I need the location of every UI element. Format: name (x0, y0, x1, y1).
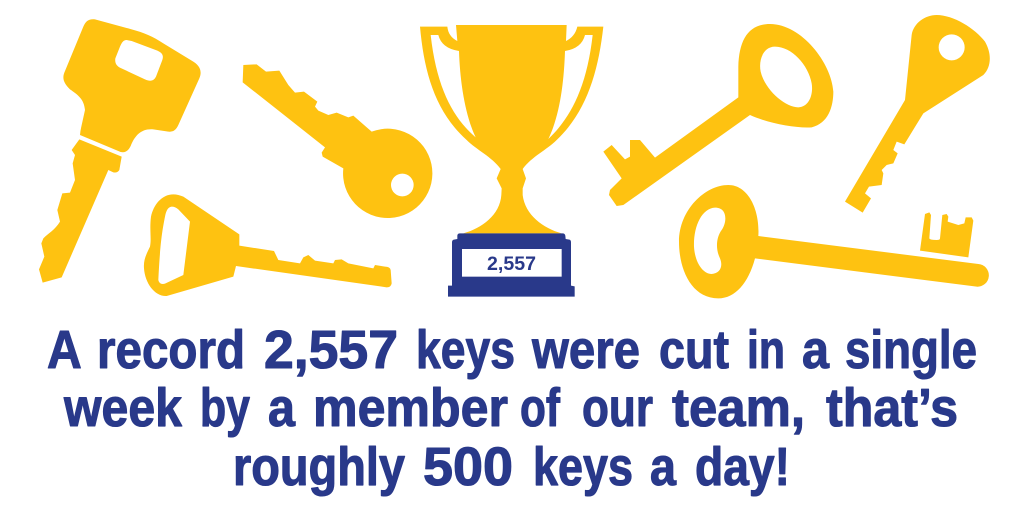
headline line 2: a (268, 379, 296, 438)
icon: long-shaft key, bottom right (679, 185, 989, 298)
icon: bottle-opener key, bottom left (144, 194, 392, 296)
headline line 1: were (531, 321, 640, 380)
trophy value: 2,557 (487, 253, 536, 275)
headline line 2: week (63, 379, 182, 438)
icon: teardrop-head key, far right (845, 15, 990, 213)
headline line 1: cut (659, 321, 729, 380)
headline line 1: in (747, 321, 785, 380)
headline line 3: keys (533, 438, 633, 497)
key bit (920, 212, 973, 257)
headline line 1: keys (416, 321, 515, 380)
headline line 1: record (97, 321, 245, 380)
headline line 2: team, (672, 379, 805, 438)
headline line 1: single (845, 321, 977, 380)
headline line 2: that’s (826, 379, 958, 438)
headline line 2: our (582, 379, 653, 438)
headline (47, 321, 977, 497)
headline line 1: 2,557 (264, 321, 398, 380)
headline line 3: 500 (423, 438, 513, 497)
trophy cup (420, 25, 603, 233)
trophy base (448, 233, 575, 297)
headline line 3: roughly (233, 438, 405, 497)
headline line 2: member (313, 379, 508, 438)
icon: trophy (420, 25, 603, 297)
icon: round-head key, top centre-left (243, 64, 432, 218)
trophy plaque (462, 249, 562, 277)
icon: square-head key, top left (39, 19, 201, 283)
icon: oval-head key, top right (603, 24, 833, 206)
headline line 2: of (520, 379, 560, 438)
headline line 3: a (650, 438, 677, 497)
headline line 1: a (802, 321, 830, 380)
headline line 1: A (47, 321, 81, 380)
headline line 3: day! (695, 438, 790, 497)
headline line 2: by (200, 379, 250, 438)
